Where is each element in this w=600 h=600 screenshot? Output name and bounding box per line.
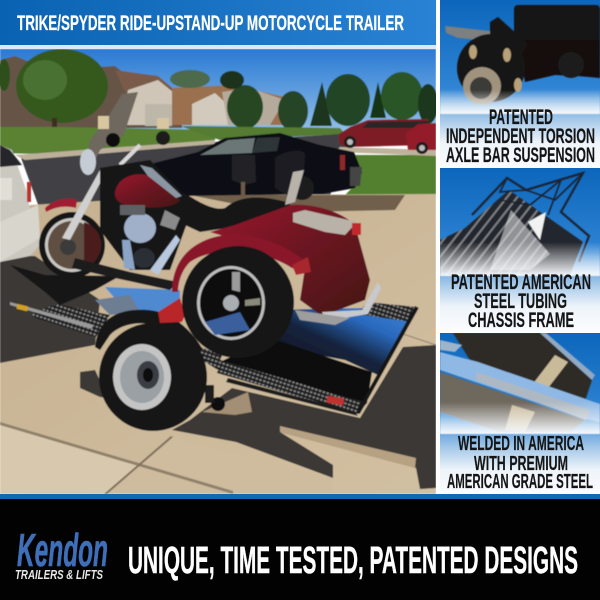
floorboard — [72, 258, 178, 290]
rear end grate — [358, 302, 417, 322]
panel background — [440, 0, 600, 168]
motorcycle — [39, 92, 381, 358]
logo: Kendon: TRAILERS & LIFTS — [15, 567, 103, 582]
luggage rack — [293, 210, 357, 235]
blue reflective deck — [105, 287, 180, 325]
front tyre — [39, 212, 105, 278]
background trees — [0, 49, 436, 128]
windshield — [88, 92, 138, 159]
front grate — [30, 304, 110, 337]
white suv at left — [0, 145, 40, 262]
photo: motorcycle on trailer in driveway — [0, 49, 438, 494]
front fender — [45, 199, 77, 212]
trailer rim — [113, 344, 171, 410]
panel caption — [447, 432, 593, 493]
header bar — [0, 0, 436, 45]
panel caption — [451, 271, 591, 332]
red suv — [339, 119, 436, 154]
tank — [115, 174, 180, 208]
trailer — [10, 265, 417, 431]
header fade — [0, 45, 436, 49]
trailer tyre — [99, 323, 207, 431]
black footer — [0, 499, 600, 600]
slab seams — [403, 334, 436, 346]
lit grate shadow patches — [280, 426, 416, 468]
panel: torsion axle suspension — [440, 0, 600, 168]
panel caption — [446, 106, 595, 167]
panel caption: PATENTED — [489, 106, 553, 129]
forks — [62, 170, 106, 240]
sky — [0, 49, 436, 139]
lawns — [0, 127, 215, 155]
panel: welded in america — [440, 333, 600, 494]
lower slab lighter — [0, 425, 136, 494]
chassis image — [440, 173, 600, 276]
background houses — [0, 56, 285, 128]
engine chrome — [124, 213, 156, 243]
headlight and mirrors — [98, 116, 109, 129]
trike fender — [172, 235, 307, 292]
main deck plate — [278, 308, 408, 376]
axle image — [440, 5, 600, 114]
trike rim — [197, 266, 265, 340]
seat — [181, 192, 290, 232]
dark frame — [100, 160, 190, 270]
panel background — [440, 333, 600, 494]
logo: Kendon: Kendon — [17, 524, 108, 576]
side rails — [358, 307, 417, 413]
weld image — [440, 333, 600, 434]
trike rear body — [210, 205, 370, 316]
rear light — [326, 396, 344, 406]
panel: steel tubing chassis — [440, 168, 600, 332]
header banner — [0, 0, 436, 49]
jack wheel — [211, 397, 225, 411]
trike tyre — [182, 246, 294, 358]
cast shadows — [0, 256, 436, 489]
side grate — [217, 360, 367, 414]
black car — [154, 133, 362, 200]
panel background — [440, 168, 600, 331]
road and driveway — [20, 134, 350, 210]
footer band — [0, 494, 600, 600]
chrome bumper — [322, 282, 381, 321]
red tail light — [158, 298, 185, 323]
logo: Kendon — [15, 524, 108, 582]
backrests — [232, 155, 256, 185]
fender — [95, 310, 203, 350]
blue rule — [0, 494, 600, 499]
